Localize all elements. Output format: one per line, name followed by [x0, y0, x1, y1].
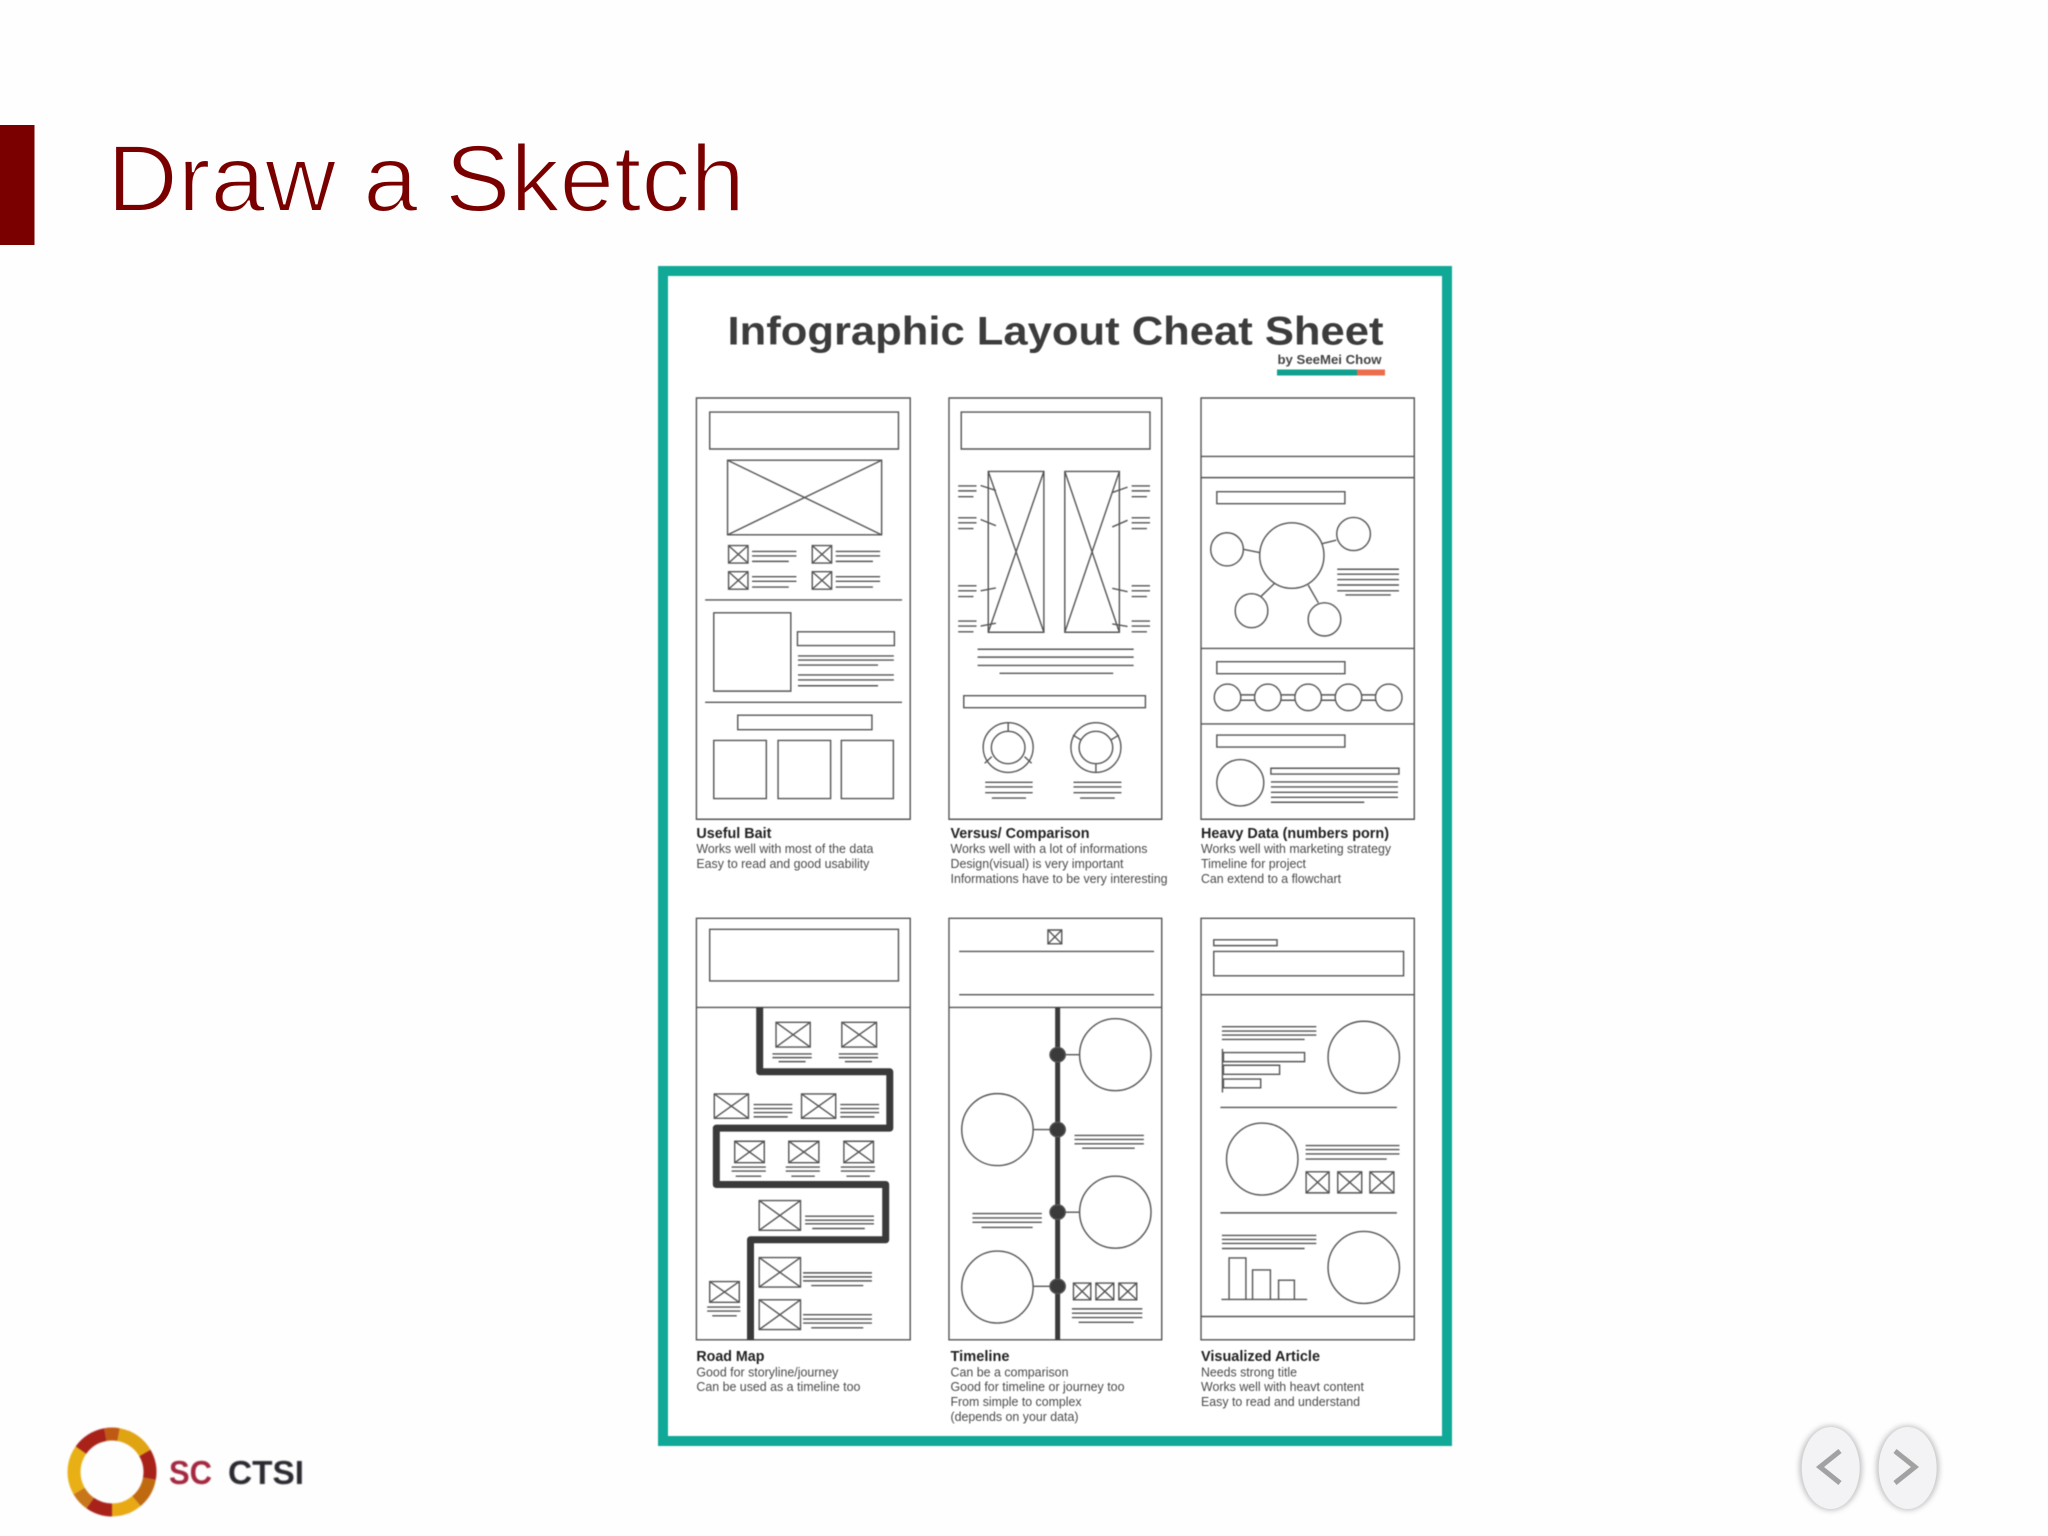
caption: Useful Bait: Useful Bait: [696, 826, 772, 842]
caption: Timeline: From simple to complex: [950, 1394, 1082, 1409]
caption: Visualized Article: [1201, 1349, 1364, 1409]
caption: Road Map: Road Map: [696, 1349, 765, 1365]
title: Draw a Sketch: [107, 126, 745, 232]
caption: Timeline: Timeline: [950, 1349, 1010, 1365]
caption: Road Map: Good for storyline/journey: [696, 1364, 839, 1380]
panel: Heavy Data: [1201, 398, 1414, 886]
caption: Timeline: Good for timeline or journey too: [950, 1379, 1124, 1394]
caption: Visualized Article: Works well with heavt content: [1201, 1379, 1364, 1394]
button: previous: [1800, 1426, 1862, 1510]
caption: Visualized Article: Needs strong title: [1201, 1364, 1297, 1380]
caption: Heavy Data: Heavy Data (numbers porn): [1201, 826, 1389, 842]
caption: Versus/ Comparison: [950, 826, 1168, 886]
poster heading: Infographic Layout Cheat Sheet: [728, 310, 1384, 354]
panel: Visualized Article: [1201, 918, 1414, 1409]
wireframe: Useful Bait: [696, 398, 910, 819]
caption: Useful Bait: Works well with most of the data: [696, 841, 874, 856]
panel: Useful Bait: [696, 398, 910, 871]
byline underline: [1277, 370, 1385, 376]
button: next: [1877, 1426, 1939, 1510]
accent bar: [0, 125, 34, 245]
caption: Heavy Data: Works well with marketing strategy: [1201, 841, 1391, 856]
logo ring: [74, 1434, 150, 1510]
caption: Heavy Data: [1201, 826, 1391, 886]
caption: Useful Bait: [696, 826, 874, 871]
logo: SC CTSI: [74, 1434, 304, 1510]
caption: Visualized Article: Visualized Article: [1201, 1349, 1320, 1365]
cheat sheet poster: [663, 271, 1447, 1441]
poster byline: by SeeMei Chow: [1278, 352, 1382, 367]
caption: Versus/ Comparison: Informations have to be very interesting: [950, 871, 1168, 886]
logo wordmark: SC: [169, 1454, 212, 1491]
wireframe: Heavy Data: [1201, 398, 1414, 819]
wireframe: Versus/ Comparison: [949, 398, 1162, 819]
caption: Versus/ Comparison: Versus/ Comparison: [950, 826, 1090, 842]
wireframe: Road Map: [696, 918, 910, 1340]
caption: Timeline: (depends on your data): [950, 1409, 1078, 1424]
panel: Timeline: [949, 918, 1162, 1424]
poster frame: [663, 271, 1447, 1441]
caption: Visualized Article: Easy to read and understand: [1201, 1394, 1360, 1409]
panel: Road Map: [696, 918, 910, 1394]
caption: Timeline: [950, 1349, 1124, 1424]
caption: Heavy Data: Timeline for project: [1201, 856, 1306, 871]
caption: Heavy Data: Can extend to a flowchart: [1201, 871, 1341, 886]
caption: Versus/ Comparison: Works well with a lot of informations: [950, 841, 1148, 856]
caption: Road Map: [696, 1349, 860, 1394]
caption: Road Map: Can be used as a timeline too: [696, 1379, 860, 1394]
caption: Versus/ Comparison: Design(visual) is very important: [950, 856, 1124, 871]
logo wordmark: CTSI: [228, 1454, 304, 1491]
logo wordmark: [169, 1454, 304, 1491]
caption: Useful Bait: Easy to read and good usability: [696, 856, 870, 871]
wireframe: Visualized Article: [1201, 918, 1414, 1340]
wireframe: Timeline: [949, 918, 1162, 1340]
caption: Timeline: Can be a comparison: [950, 1364, 1068, 1380]
panel: Versus/ Comparison: [949, 398, 1168, 886]
